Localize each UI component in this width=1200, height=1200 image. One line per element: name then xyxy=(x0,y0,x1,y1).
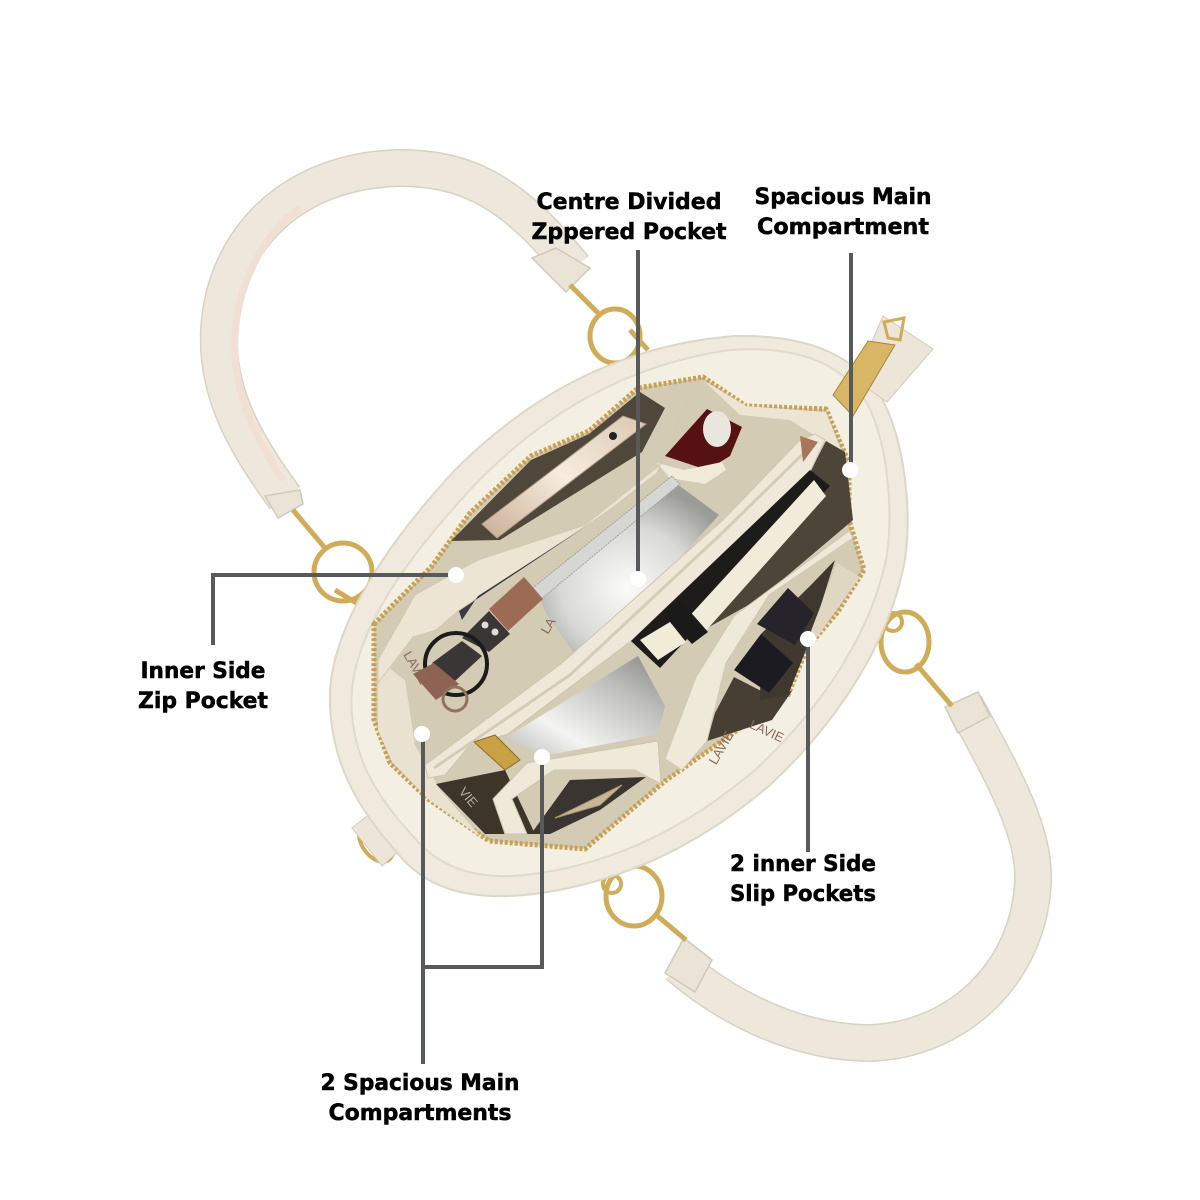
bag interior lining with gold zipper xyxy=(374,377,864,849)
label on lining: VIE xyxy=(456,784,481,810)
phone xyxy=(482,416,646,538)
callout: Inner Side Zip Pocket: Zip Pocket xyxy=(138,689,268,714)
label on lining: LAVIE xyxy=(400,648,432,687)
dark interior shadows xyxy=(436,392,853,834)
slip pocket with black boxes xyxy=(665,531,860,770)
label on lining: LAVIE xyxy=(747,717,787,745)
front slip pocket with keys xyxy=(493,741,661,834)
label on lining xyxy=(400,615,787,810)
bag body xyxy=(330,336,908,896)
strap tab with gold zip pull xyxy=(833,316,933,416)
bottom handle hardware: gold rings xyxy=(603,612,952,940)
keychain xyxy=(413,577,543,711)
centre divided zip pocket xyxy=(425,434,825,778)
callout: 2 Spacious Main Compartments xyxy=(320,726,550,1126)
bottom handle xyxy=(665,692,1033,1043)
label on lining: LAVIE xyxy=(613,741,652,770)
callout: Inner Side Zip Pocket: Inner Side xyxy=(140,659,266,684)
label on lining: LAVIE xyxy=(706,728,737,767)
strap loop: lower-left xyxy=(352,812,400,868)
top handle hardware: gold rings xyxy=(293,285,648,604)
notebook xyxy=(631,470,830,668)
round silver tin, upper xyxy=(530,476,719,657)
callout: 2 inner Side Slip Pockets xyxy=(730,631,876,907)
silver tin, lower xyxy=(505,656,665,756)
callout: Spacious Main Compartment xyxy=(754,185,932,478)
callout: Inner Side Zip Pocket xyxy=(138,567,464,714)
callout: Centre Divided Zippered Pocket xyxy=(532,190,727,587)
lipstick cap xyxy=(657,409,742,484)
callout: 2 Spacious Main Compartments: 2 Spacious Main xyxy=(320,1071,520,1096)
callout: Spacious Main Compartment: Compartment xyxy=(757,215,929,240)
callout: Spacious Main Compartment: Spacious Main xyxy=(754,185,932,210)
callout: 2 Spacious Main Compartments: Compartments xyxy=(328,1101,512,1126)
callout: Centre Divided Zippered Pocket: Centre Divided xyxy=(536,190,722,215)
side zip pocket flap xyxy=(378,395,690,683)
callout: Centre Divided Zippered Pocket: Zppered Pocket xyxy=(532,220,727,245)
label on lining: LA xyxy=(538,615,559,636)
callout: 2 inner Side Slip Pockets: Slip Pockets xyxy=(730,882,876,907)
callout: 2 inner Side Slip Pockets: 2 inner Side xyxy=(730,852,876,877)
top handle xyxy=(219,168,590,518)
